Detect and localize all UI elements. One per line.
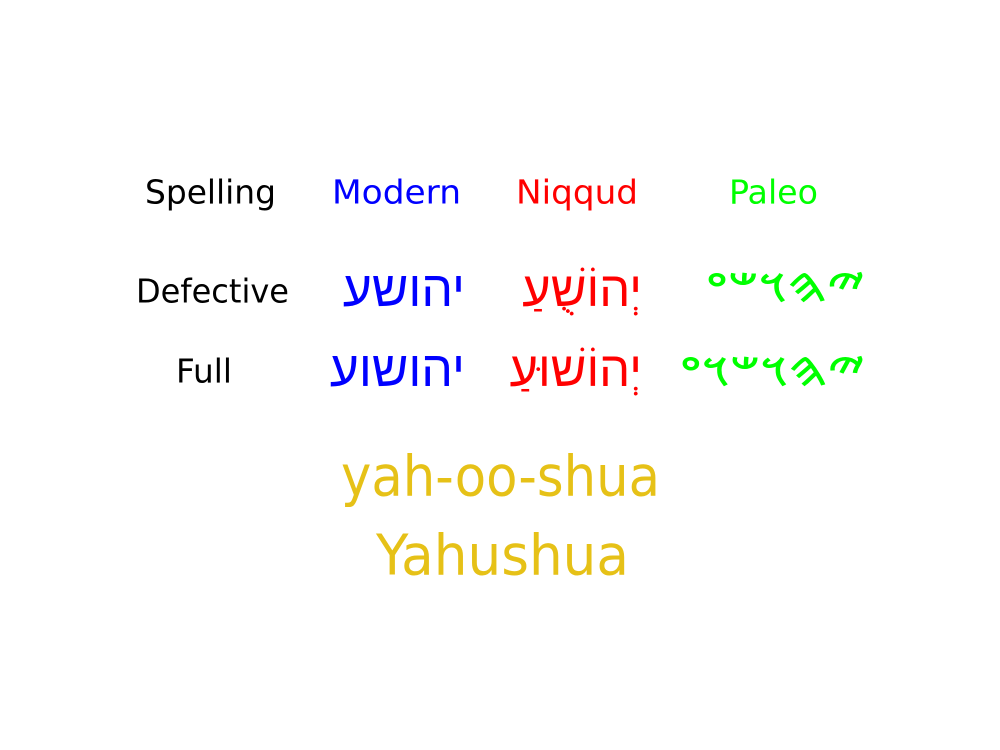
modern spelling: full: יהושוע: [330, 341, 465, 397]
row label: Defective: Defective: [136, 272, 289, 310]
modern spelling: defective: יהושע: [343, 261, 465, 317]
row label: Spelling: Spelling: [145, 172, 276, 212]
row label: Full: Full: [176, 352, 232, 390]
column heading: Niqqud: Niqqud: [516, 172, 638, 212]
pronunciation: yah-oo-shua: yah-oo-shua: [341, 444, 660, 510]
paleo spelling: full: 𐤉𐤄𐤅𐤔𐤅𐤏: [680, 342, 865, 398]
paleo spelling: defective: 𐤉𐤄𐤅𐤔𐤏: [706, 258, 865, 314]
column heading: Modern: Modern: [332, 172, 461, 212]
niqqud spelling: full: יְהוֹשׁוּעַ: [509, 343, 642, 397]
column heading: Paleo: Paleo: [729, 172, 818, 212]
niqqud spelling: defective: יְהוֹשֻׁעַ: [522, 263, 642, 317]
name: Yahushua: Yahushua: [375, 524, 629, 588]
